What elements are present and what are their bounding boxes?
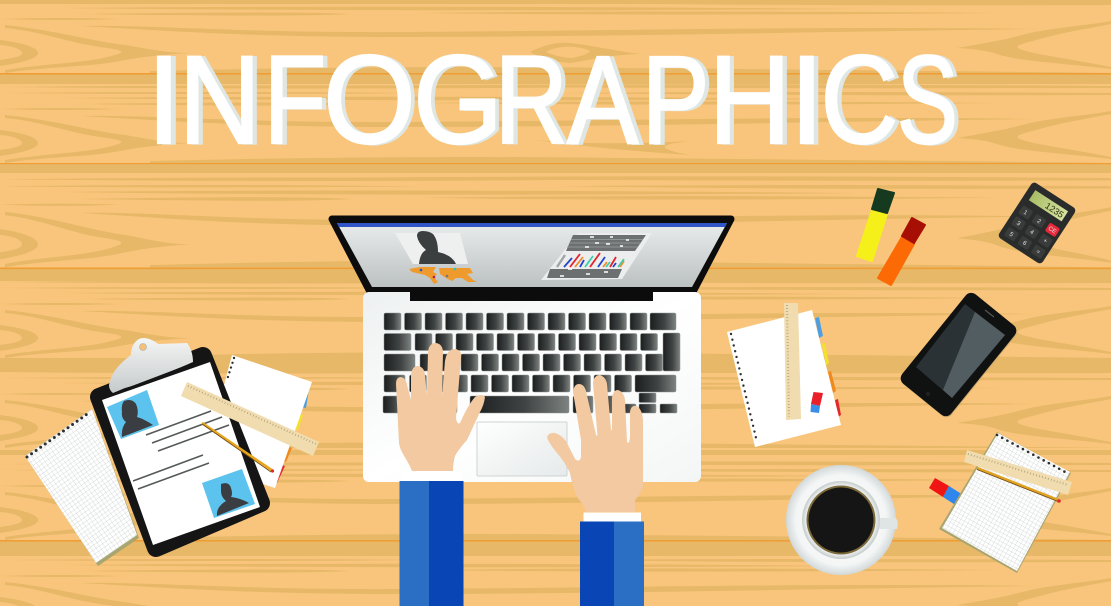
calculator keys: 6	[1021, 240, 1028, 248]
calculator keys: +	[1042, 238, 1048, 245]
clipboard set	[25, 338, 319, 566]
coffee	[806, 486, 876, 554]
right sleeve	[580, 512, 644, 606]
pencil on notebook	[977, 468, 1061, 503]
eraser	[810, 392, 823, 413]
title: R	[499, 32, 572, 170]
saucer	[786, 465, 896, 575]
calculator	[997, 181, 1077, 265]
back notebook	[220, 355, 312, 488]
left hand	[396, 343, 485, 471]
title: P	[646, 32, 714, 170]
laptop screen	[337, 223, 727, 287]
screen chart sheet	[541, 233, 652, 280]
handle	[878, 518, 898, 529]
hinge	[410, 290, 653, 301]
laptop lid	[332, 219, 731, 290]
pencil	[202, 423, 274, 473]
title: N	[179, 31, 261, 170]
cup rim	[802, 481, 880, 559]
calculator display: 1235	[1043, 201, 1066, 220]
trackpad	[477, 422, 567, 476]
title: A	[572, 32, 643, 170]
ruler	[181, 382, 319, 456]
title: O	[323, 31, 416, 170]
middle notebook	[727, 303, 841, 447]
title: R	[495, 31, 568, 170]
ruler on notebook	[964, 450, 1072, 495]
clipboard clip	[109, 338, 193, 393]
eraser block	[929, 478, 963, 506]
title: H	[713, 32, 795, 170]
right hand	[547, 375, 643, 512]
title: G	[413, 31, 503, 170]
bottom right notebook	[929, 432, 1072, 573]
resume photo two	[202, 469, 255, 518]
title: I	[794, 32, 829, 170]
screen photo card	[395, 231, 468, 264]
title: F	[268, 32, 331, 170]
laptop base	[363, 292, 701, 482]
title: G	[417, 32, 506, 170]
notebook tabs	[815, 317, 841, 417]
resume photo one	[107, 390, 159, 439]
title: I	[146, 31, 181, 170]
title: I	[152, 32, 186, 170]
calculator keys: 2	[1035, 219, 1042, 226]
screen world map	[409, 267, 477, 284]
calculator keys: 5	[1008, 232, 1015, 239]
title: C	[821, 31, 898, 170]
title: S	[901, 32, 962, 170]
title: H	[709, 31, 791, 170]
title: S	[897, 31, 958, 170]
left sleeve	[400, 471, 464, 606]
title: A	[567, 31, 639, 170]
title: C	[825, 32, 903, 170]
laptop	[332, 219, 731, 482]
calculator keys: 4	[1028, 229, 1035, 237]
title: F	[264, 31, 326, 170]
clipboard board	[99, 356, 261, 548]
notebook page	[727, 310, 841, 447]
calculator keys: 1	[1022, 210, 1029, 217]
grid notebook left	[25, 409, 139, 566]
calculator keys: 3	[1015, 221, 1022, 228]
coffee cup	[786, 465, 898, 575]
keyboard	[383, 313, 680, 413]
yellow highlighter	[857, 189, 894, 261]
title: N	[183, 32, 265, 170]
clipboard paper	[102, 362, 260, 545]
title: P	[642, 31, 709, 170]
title	[146, 31, 962, 170]
calculator keys: CE	[1047, 226, 1057, 235]
resume text lines	[133, 411, 229, 489]
smartphone	[898, 290, 1020, 420]
upright ruler	[784, 303, 801, 420]
title: O	[327, 32, 419, 170]
calculator keys	[1004, 205, 1060, 259]
orange highlighter	[878, 218, 925, 285]
calculator keys: =	[1035, 249, 1041, 256]
title: I	[790, 31, 824, 170]
